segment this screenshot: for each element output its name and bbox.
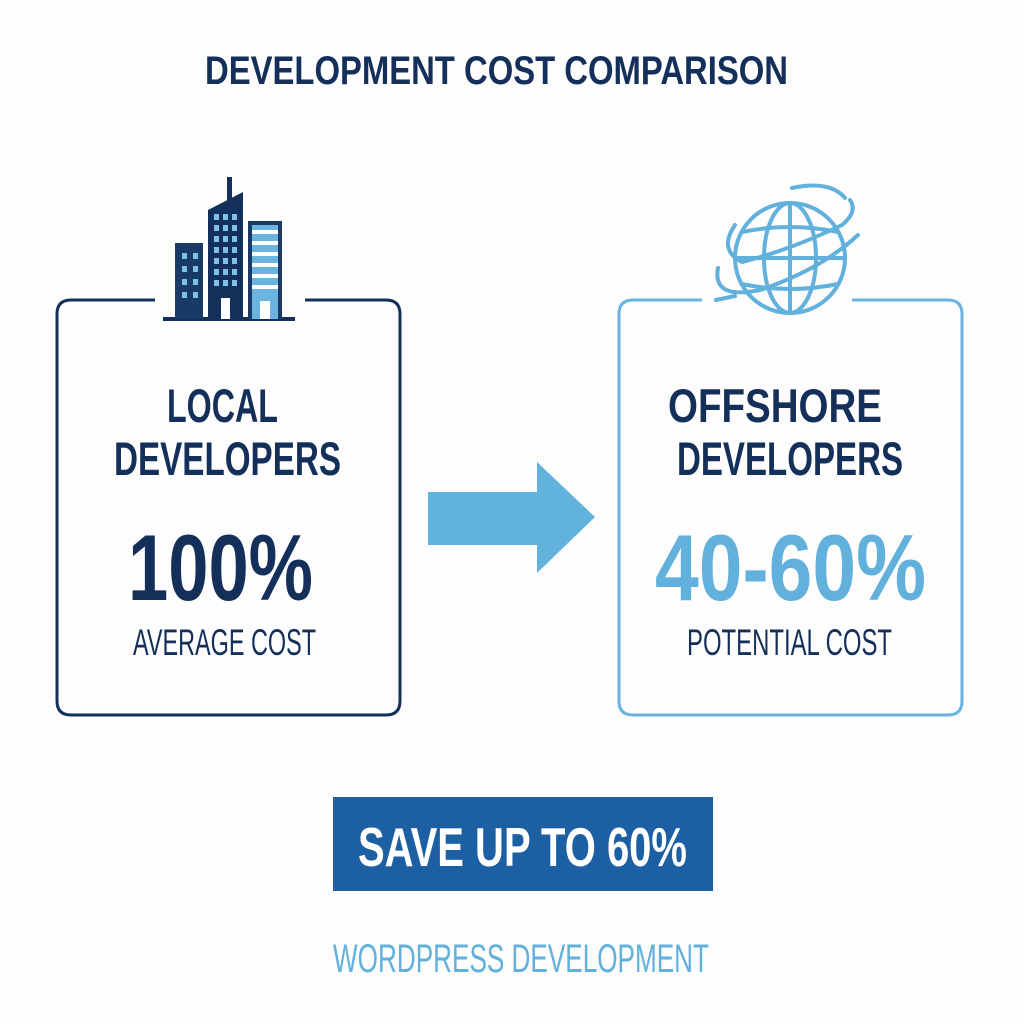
panel: local developers xyxy=(57,177,400,715)
icon: buildings xyxy=(163,177,295,321)
heading: local developers: LOCAL xyxy=(167,379,278,432)
label: average cost: AVERAGE COST xyxy=(133,622,316,663)
label: potential cost: POTENTIAL COST xyxy=(687,622,892,663)
footer: WORDPRESS DEVELOPMENT xyxy=(333,937,709,981)
arrow xyxy=(428,462,595,573)
value: 40-60%: 40-60% xyxy=(655,515,926,620)
icon: globe xyxy=(716,186,858,313)
callout: save up to 60%: SAVE UP TO 60% xyxy=(358,816,687,878)
value: 100%: 100% xyxy=(128,515,313,620)
panel: local developers: DEVELOPERS xyxy=(114,432,341,485)
callout: save up to 60% xyxy=(333,797,713,891)
panel: offshore developers xyxy=(619,186,962,715)
title: DEVELOPMENT COST COMPARISON xyxy=(205,49,788,93)
panel: offshore developers: DEVELOPERS xyxy=(677,432,903,485)
heading: offshore developers: OFFSHORE xyxy=(668,379,882,432)
